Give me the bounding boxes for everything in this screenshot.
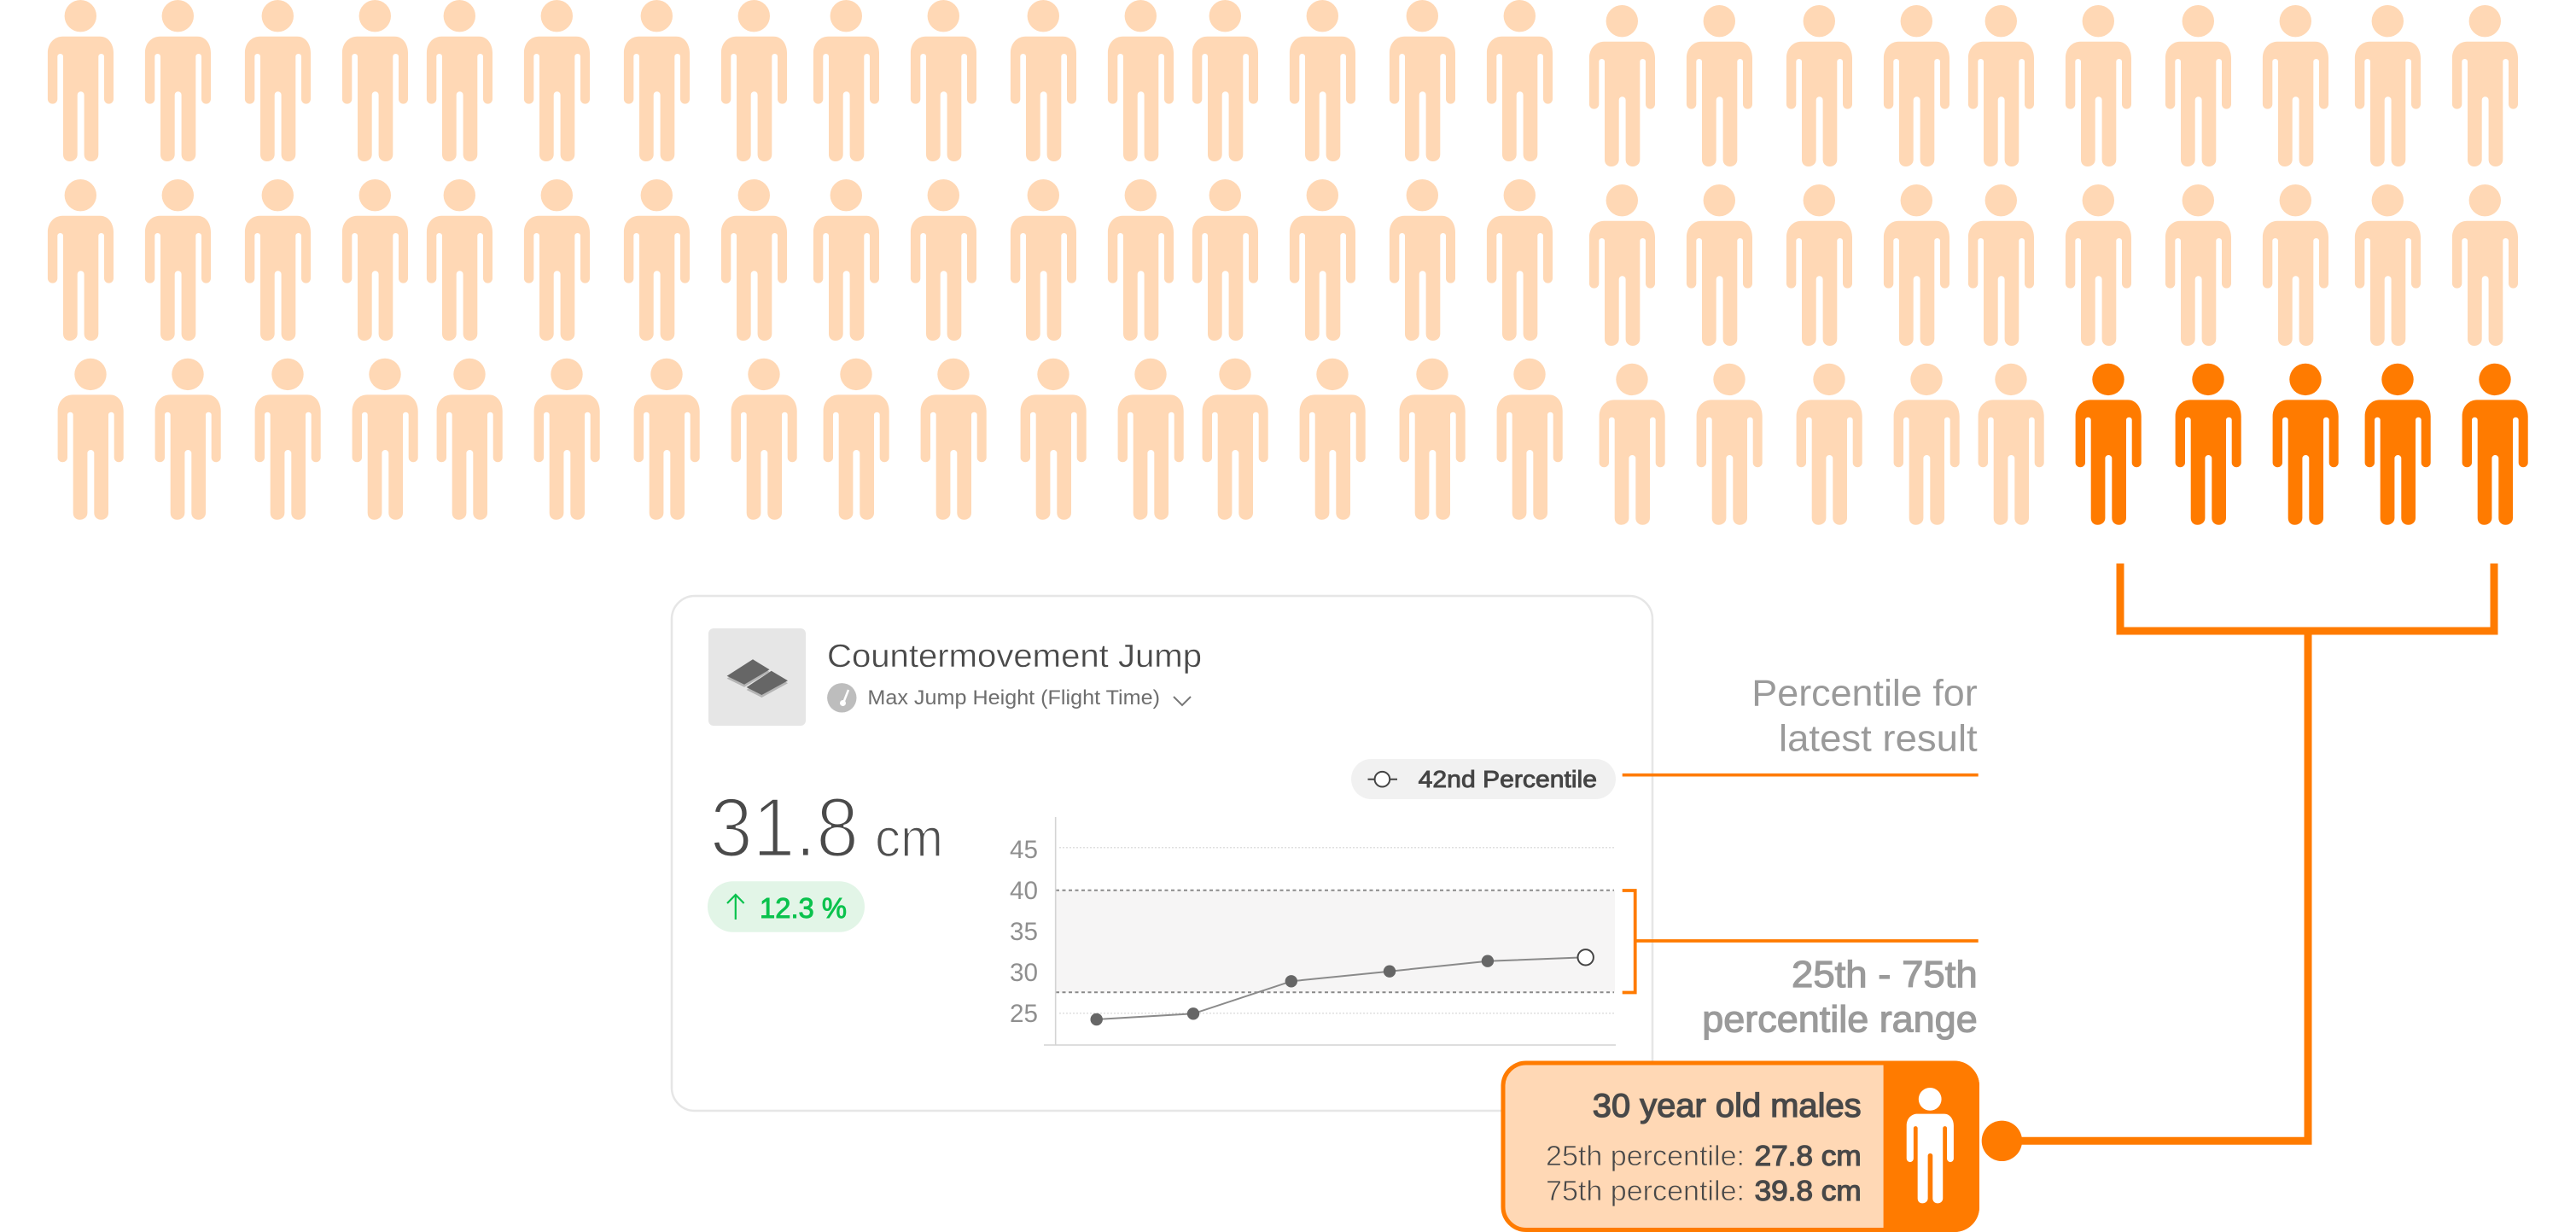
card outline	[672, 596, 1652, 1111]
y axis labels: 25	[1010, 1000, 1038, 1028]
orange icon strip	[1884, 1061, 1979, 1232]
icon: white person	[1907, 1088, 1954, 1203]
25th percentile value: 27.8 cm	[1755, 1140, 1862, 1171]
line chart	[1010, 817, 1616, 1045]
latest value	[710, 780, 943, 874]
panel: population norm card	[1503, 1061, 1979, 1232]
75th percentile value: 75th percentile:	[1546, 1175, 1745, 1206]
latest value: 31.8	[710, 780, 859, 874]
percentile pill	[1351, 759, 1616, 799]
callout: percentile for latest result: latest result	[1779, 717, 1978, 759]
75th percentile value: 39.8 cm	[1755, 1175, 1862, 1206]
grid lines and axes	[1044, 817, 1616, 1045]
percentile band	[1056, 890, 1615, 992]
callout: 25th to 75th percentile range: 25th - 75th	[1792, 954, 1978, 996]
y axis labels	[1010, 836, 1038, 1028]
latest value: cm	[875, 809, 943, 868]
percentile pill: 42nd Percentile	[1419, 766, 1597, 792]
25th percentile value: 25th percentile:	[1546, 1140, 1745, 1171]
people pictogram grid	[48, 0, 2528, 525]
callout: 25th to 75th percentile range	[1623, 890, 1979, 1040]
25th percentile value	[1546, 1140, 1862, 1171]
callout: percentile for latest result	[1623, 673, 1979, 775]
connector bracket from highlighted people to population card	[1982, 563, 2494, 1161]
row 3 of people, pale	[58, 359, 2044, 525]
y axis labels: 30	[1010, 959, 1038, 987]
y axis labels: 45	[1010, 836, 1038, 864]
change badge: 12.3 %	[760, 892, 847, 924]
75th percentile value	[1546, 1175, 1862, 1206]
population title: 30 year old males	[1593, 1088, 1862, 1124]
row 2 of people	[48, 179, 2518, 346]
row 1 of people	[48, 0, 2518, 166]
metric name: Max Jump Height (Flight Time)	[867, 686, 1160, 709]
callout: 25th to 75th percentile range: percentile range	[1702, 998, 1978, 1040]
icon: force plates tile	[708, 628, 806, 726]
change badge	[708, 881, 865, 932]
icon: gauge	[827, 683, 857, 712]
heading: test name: Countermovement Jump	[827, 639, 1202, 674]
y axis labels: 40	[1010, 877, 1038, 905]
icon: dropdown chevron	[1174, 697, 1191, 705]
highlighted people in orange	[2076, 364, 2528, 525]
data series	[1091, 949, 1594, 1025]
y axis labels: 35	[1010, 918, 1038, 946]
panel: test result card	[672, 596, 1652, 1111]
callout: percentile for latest result: Percentile for	[1751, 673, 1978, 715]
